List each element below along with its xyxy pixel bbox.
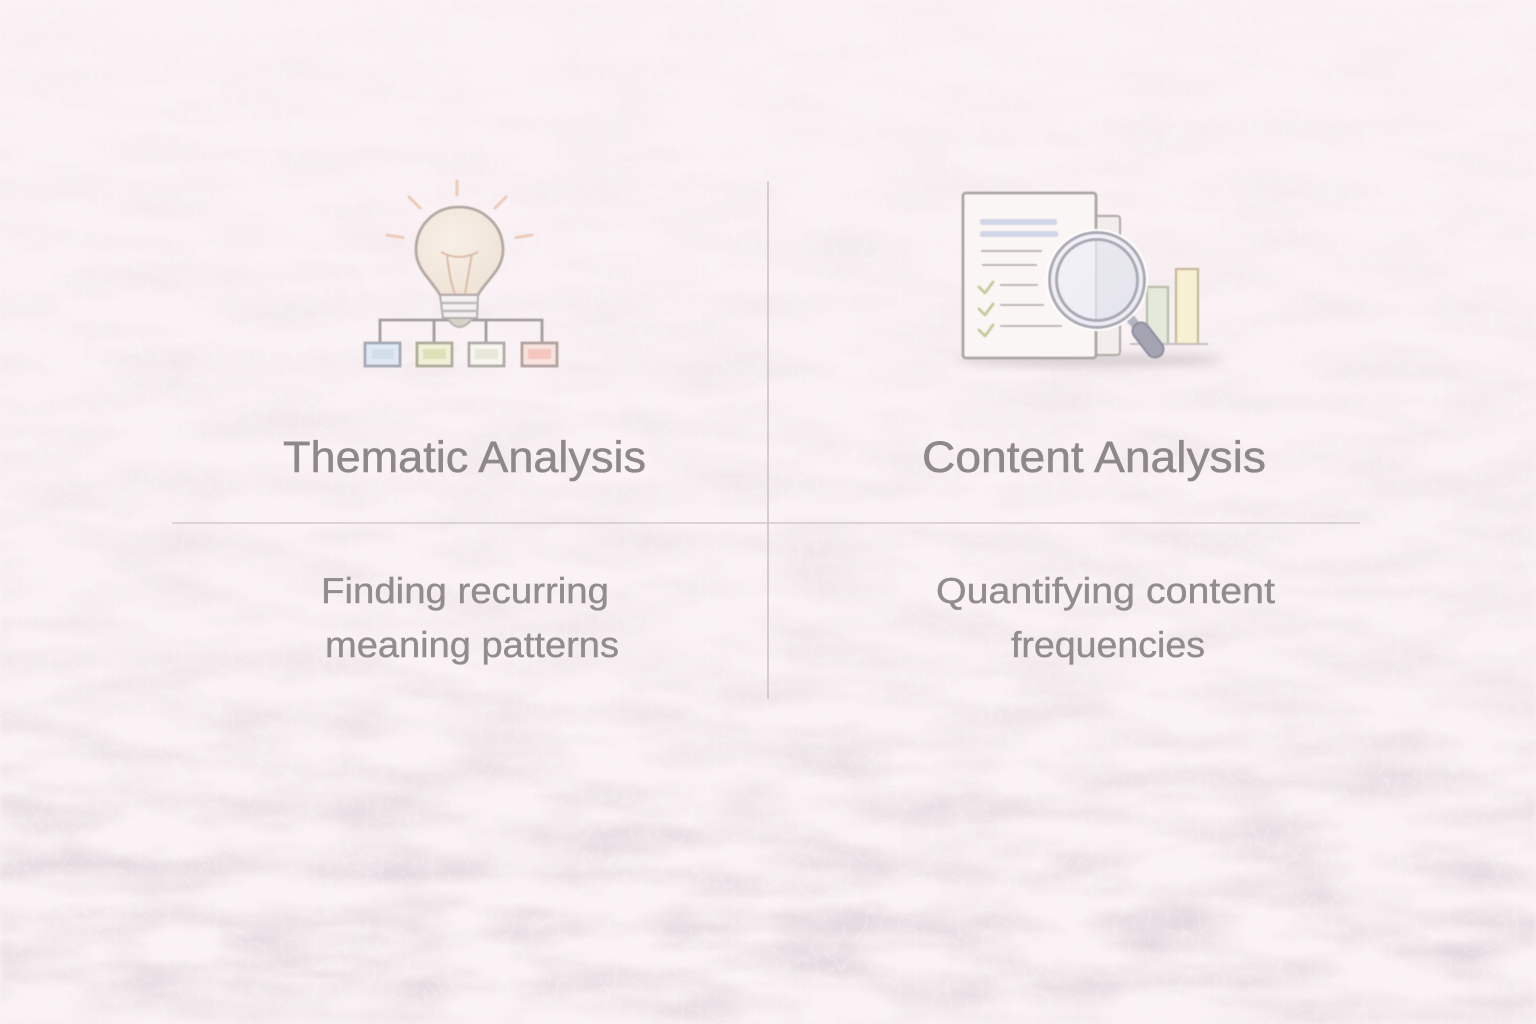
description: thematic analysis: meaning patterns <box>325 624 619 665</box>
check marks <box>979 282 993 336</box>
blue header lines <box>980 219 1058 237</box>
icon: document, magnifier and bar chart <box>955 193 1225 366</box>
box: green <box>417 343 452 366</box>
checklist lines <box>981 251 1062 326</box>
box: cream <box>469 343 504 366</box>
description: content analysis: Quantifying content <box>936 570 1275 611</box>
icon: light bulb with theme hierarchy <box>365 181 557 366</box>
heading: thematic analysis: Thematic Analysis <box>283 433 646 482</box>
description: thematic analysis <box>321 570 619 665</box>
paper background <box>0 399 1536 1022</box>
back page <box>1090 216 1120 355</box>
bar chart <box>1130 269 1208 344</box>
horizontal divider <box>172 522 1360 524</box>
light rays <box>387 181 532 238</box>
vertical divider <box>767 181 769 699</box>
tree connectors <box>380 320 542 342</box>
bulb cap <box>447 318 473 327</box>
bulb glass <box>416 207 503 295</box>
ground shadow <box>955 354 1225 366</box>
description: content analysis <box>936 570 1275 665</box>
front page <box>963 193 1096 358</box>
magnifier handle <box>1130 318 1155 349</box>
heading: content analysis: Content Analysis <box>922 433 1266 482</box>
box: blue <box>365 343 400 366</box>
description: thematic analysis: Finding recurring <box>321 570 609 611</box>
description: content analysis: frequencies <box>1011 624 1205 665</box>
magnifier lens <box>1048 231 1146 329</box>
box: coral <box>522 343 557 366</box>
panel: thematic analysis <box>283 181 646 665</box>
bulb screw base <box>440 295 478 318</box>
panel: content analysis <box>922 193 1275 665</box>
filament <box>441 252 478 294</box>
